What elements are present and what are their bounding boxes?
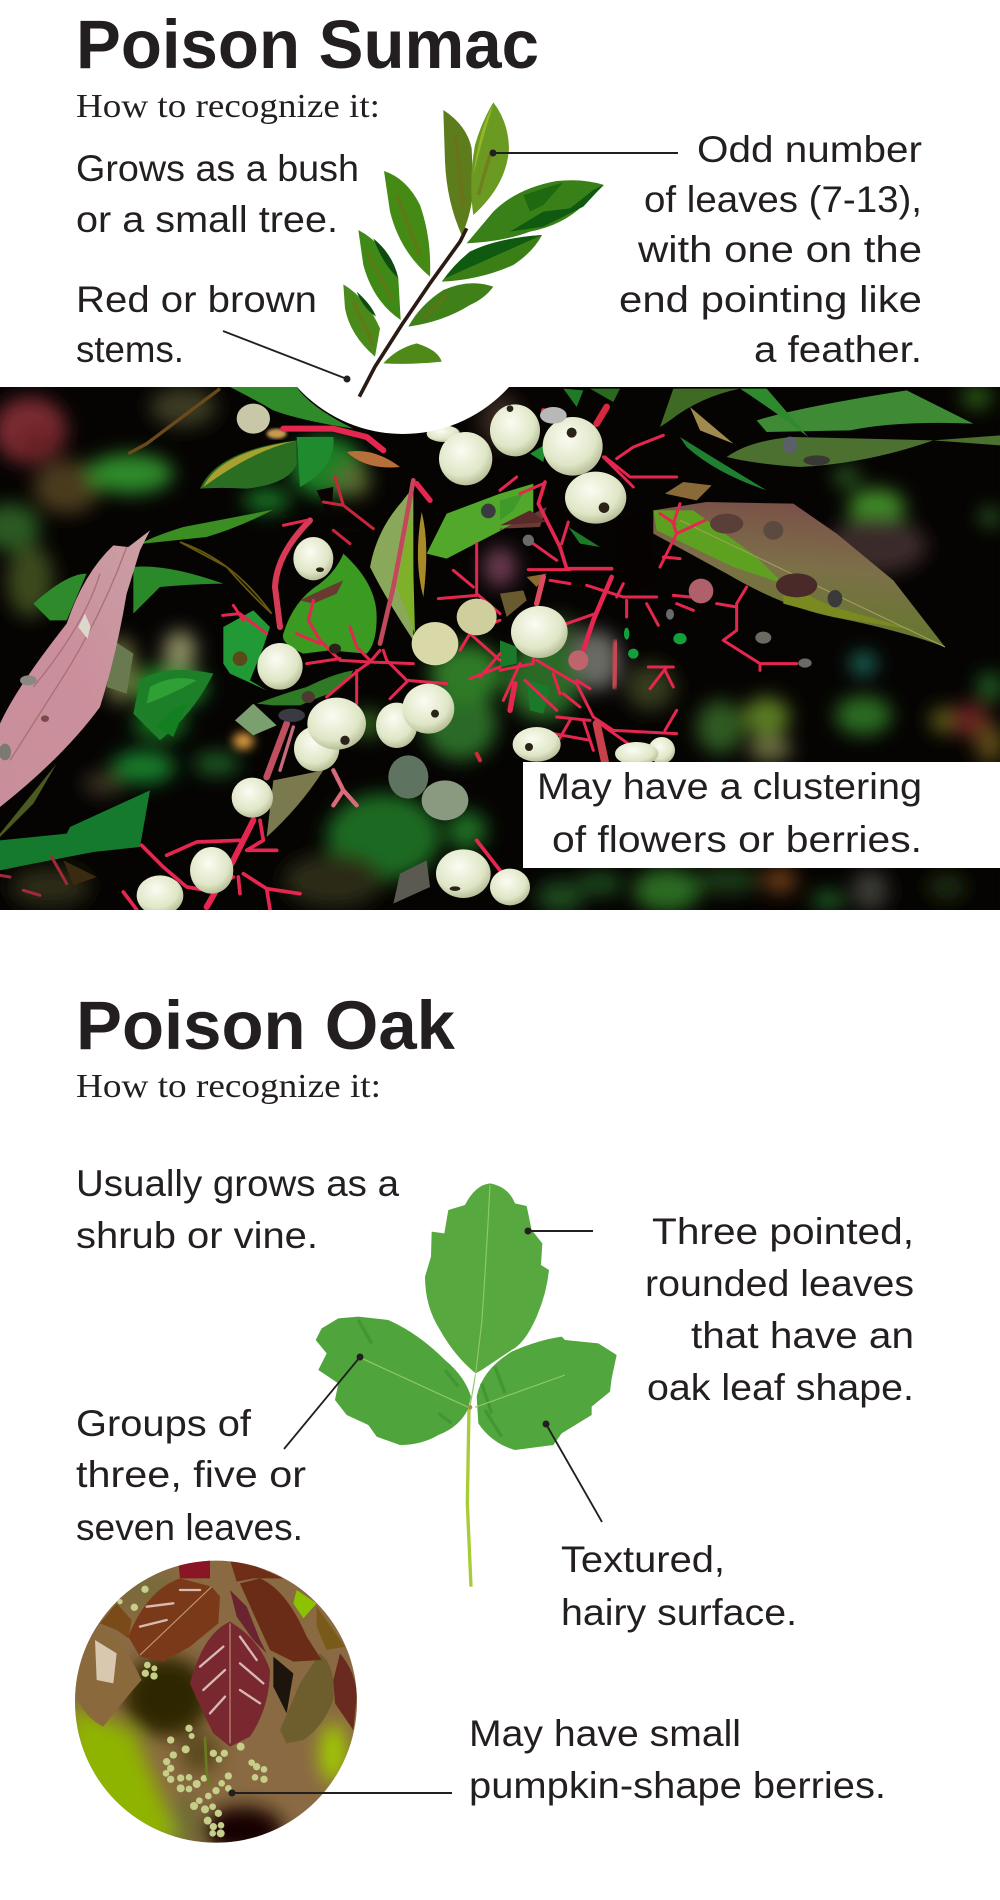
callout line: pumpkin-shape berries <box>228 1790 452 1796</box>
text: odd number of leaves: of leaves (7-13), <box>644 179 922 220</box>
text: groups of three five or seven: Groups of <box>76 1403 252 1444</box>
callout line: textured surface <box>542 1420 602 1522</box>
text: grows as a bush <box>76 148 359 240</box>
text: textured hairy surface: Textured, <box>561 1539 725 1580</box>
text: odd number of leaves: Odd number <box>697 129 922 170</box>
text: grows as a bush: or a small tree. <box>76 199 338 240</box>
text: usually grows as a shrub: Usually grows as a <box>76 1163 399 1204</box>
berry marks and buds <box>278 405 812 891</box>
caption box: clustering of flowers or berries <box>523 762 1000 868</box>
text: small pumpkin-shape berries <box>469 1713 886 1806</box>
image: sumac branch <box>343 102 604 397</box>
caption box: clustering of flowers or berries: May have a clustering <box>537 766 922 807</box>
callout line: red stems <box>223 331 350 382</box>
text: groups of three five or seven: seven leaves. <box>76 1507 303 1548</box>
text: odd number of leaves <box>619 129 922 370</box>
berries <box>137 404 675 915</box>
text: groups of three five or seven: three, five or <box>76 1454 306 1495</box>
image: three-leaf poison oak <box>316 1183 617 1587</box>
photo: sumac berries and red stems <box>0 385 1000 915</box>
text: red or brown stems <box>76 279 317 370</box>
text: odd number of leaves: end pointing like <box>619 279 922 320</box>
left leaves <box>128 389 220 454</box>
title: Poison Oak: Poison Oak <box>76 987 456 1064</box>
text: odd number of leaves: a feather. <box>754 329 922 370</box>
text: grows as a bush: Grows as a bush <box>76 148 359 189</box>
notch: white semicircle over photo <box>260 148 546 434</box>
text: red or brown stems: Red or brown <box>76 279 317 320</box>
text: three pointed rounded leaves: rounded leaves <box>645 1263 914 1304</box>
text: red or brown stems: stems. <box>76 329 184 370</box>
photo: poison oak leaves and berries in circle <box>70 1557 363 1853</box>
title: Poison Sumac: Poison Sumac <box>76 6 539 83</box>
text: small pumpkin-shape berries: May have small <box>469 1713 741 1754</box>
caption box: clustering of flowers or berries: of flowers or berries. <box>552 819 922 860</box>
text: groups of three five or seven <box>76 1403 306 1548</box>
callout line: odd number to leaf <box>490 150 678 156</box>
text: three pointed rounded leaves: Three pointed, <box>652 1211 914 1252</box>
text: three pointed rounded leaves: oak leaf shape. <box>647 1367 914 1408</box>
callout line: oak leaf shape <box>524 1228 593 1234</box>
text: odd number of leaves: with one on the <box>637 229 922 270</box>
text: textured hairy surface: hairy surface. <box>561 1592 797 1633</box>
text: textured hairy surface <box>561 1539 797 1633</box>
red stems <box>0 407 797 910</box>
panel: poison oak header <box>76 987 456 1105</box>
panel: poison sumac header <box>76 6 539 125</box>
callout line: groups of leaves <box>284 1354 364 1449</box>
text: usually grows as a shrub: shrub or vine. <box>76 1215 318 1256</box>
subtitle: How to recognize it: <box>76 88 380 125</box>
right side leaves <box>500 389 1000 714</box>
text: three pointed rounded leaves: that have an <box>691 1315 914 1356</box>
text: usually grows as a shrub <box>76 1163 399 1256</box>
text: small pumpkin-shape berries: pumpkin-shape berries. <box>469 1765 886 1806</box>
subtitle: How to recognize it: <box>76 1068 381 1105</box>
text: three pointed rounded leaves <box>645 1211 914 1408</box>
